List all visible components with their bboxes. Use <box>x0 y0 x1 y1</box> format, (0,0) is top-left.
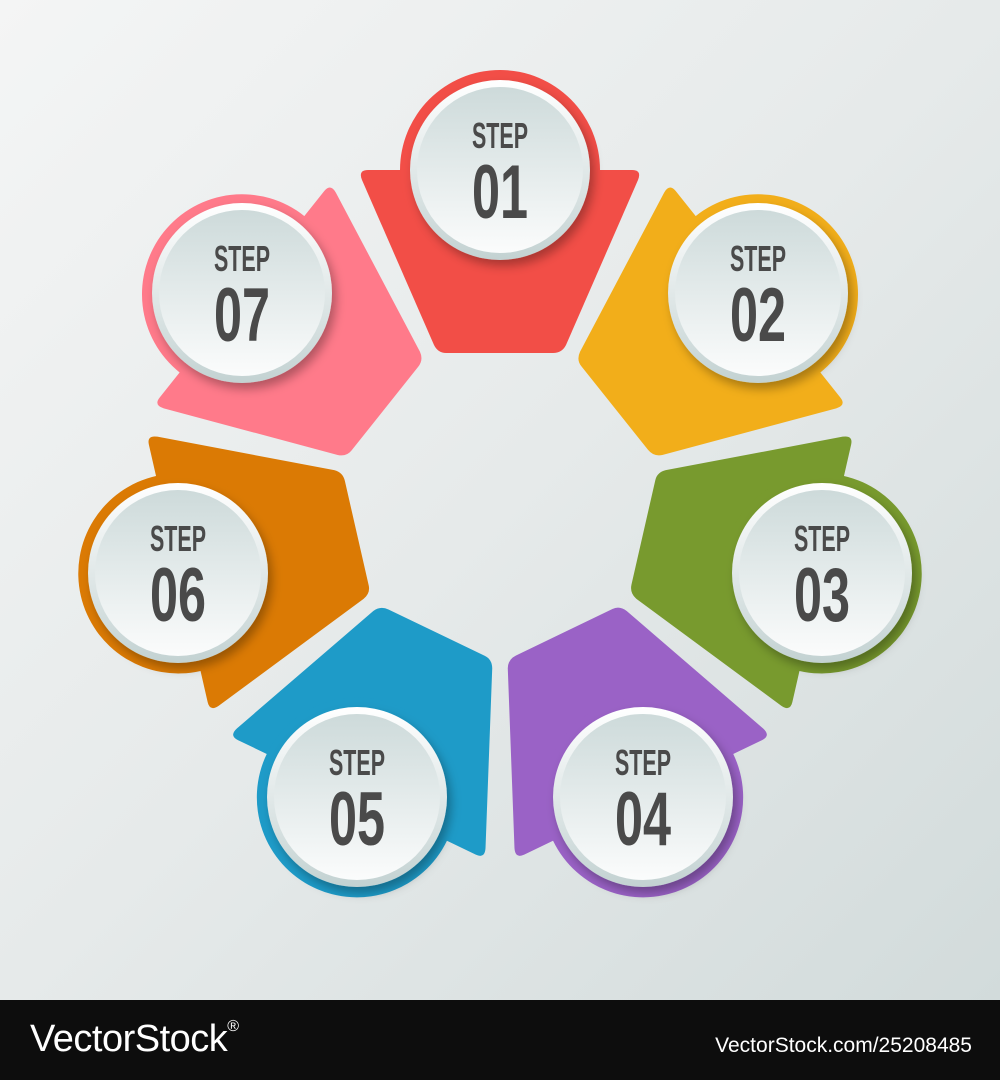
footer url: VectorStock.com/25208485 <box>715 1034 972 1057</box>
step 05: STEP <box>329 742 385 783</box>
step 02 <box>528 123 923 517</box>
step 07: 07 <box>214 273 270 358</box>
step 01 <box>361 70 639 353</box>
step 01: STEP <box>472 115 528 156</box>
step 04: STEP <box>615 742 671 783</box>
step 02: STEP <box>730 238 786 279</box>
step 03: STEP <box>794 518 850 559</box>
step 05 <box>188 572 562 948</box>
step 06: STEP <box>150 518 206 559</box>
step 06: 06 <box>150 553 206 638</box>
step 02: 02 <box>730 273 786 358</box>
step 03 <box>612 397 950 731</box>
step 01: 01 <box>472 150 528 235</box>
step 03: 03 <box>794 553 850 638</box>
step 04 <box>438 572 812 948</box>
step 05: 05 <box>329 777 385 862</box>
step 04: 04 <box>615 777 671 862</box>
step 07: STEP <box>214 238 270 279</box>
footer bar <box>0 1000 1000 1080</box>
step 07 <box>77 123 472 517</box>
footer brand: VectorStock® <box>30 1018 239 1060</box>
step 06 <box>50 397 388 731</box>
